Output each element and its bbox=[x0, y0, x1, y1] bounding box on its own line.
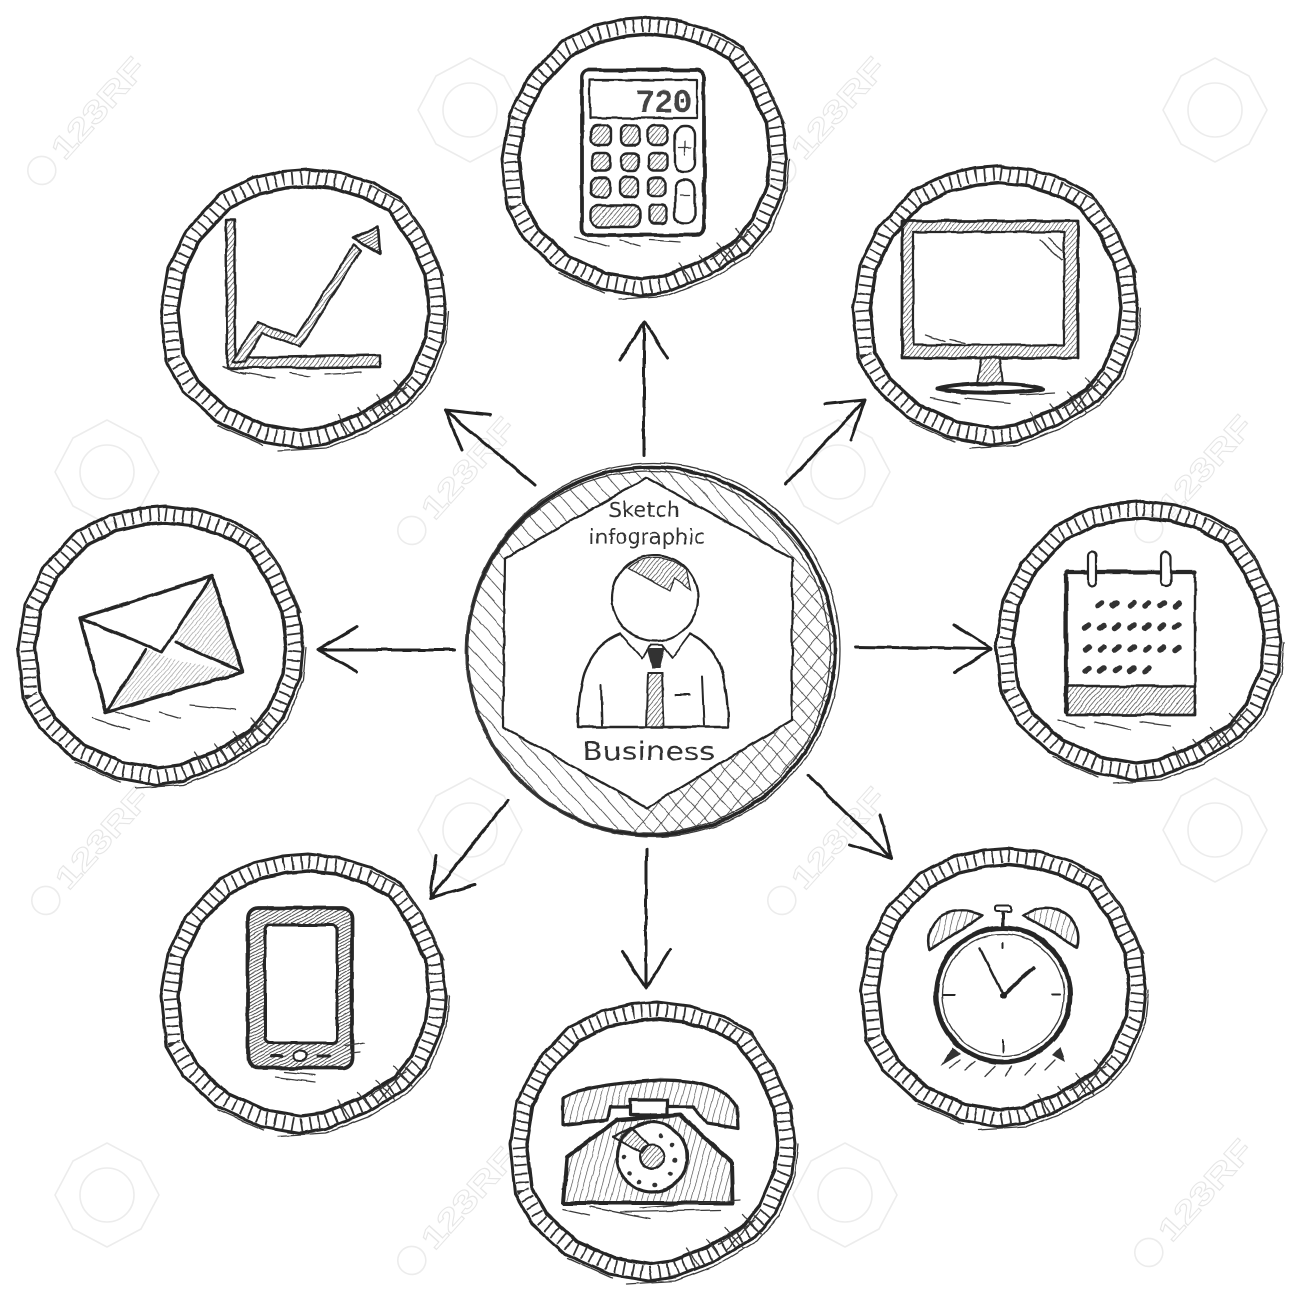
shadow bbox=[575, 237, 680, 247]
watermark stamps: 123RF bbox=[1151, 1133, 1260, 1248]
arrows from centre bbox=[318, 322, 992, 988]
panel: retro phone bbox=[510, 1002, 798, 1284]
arrow: to envelope bbox=[318, 627, 455, 672]
arrow: to mobile bbox=[430, 800, 508, 898]
collar bbox=[620, 634, 690, 658]
binder rings bbox=[1088, 552, 1096, 586]
watermark stamps: 123RF bbox=[1151, 409, 1260, 524]
watermark stamps: 123RF bbox=[44, 51, 153, 166]
panel: calculator bbox=[502, 17, 790, 299]
ring bbox=[161, 854, 449, 1136]
axes bbox=[226, 220, 380, 368]
bells bbox=[929, 910, 983, 950]
watermark stamps: 123RF bbox=[414, 1141, 523, 1256]
ring bbox=[18, 506, 306, 788]
hatched frame bbox=[467, 467, 835, 835]
panel: smartphone bbox=[161, 854, 449, 1136]
icon: smartphone bbox=[248, 908, 365, 1082]
ring bbox=[853, 166, 1141, 448]
handset bbox=[563, 1080, 738, 1128]
panel: monitor bbox=[853, 166, 1141, 448]
watermark stamps: 123RF bbox=[414, 411, 523, 526]
clock body bbox=[936, 928, 1070, 1062]
label: infographic: infographic bbox=[589, 525, 705, 549]
panel: alarm clock bbox=[861, 848, 1149, 1130]
dial bbox=[617, 1122, 687, 1192]
watermark stamps: 123RF bbox=[784, 781, 893, 896]
icon: rotary telephone bbox=[562, 1080, 740, 1219]
watermark stamps: 123RF bbox=[48, 781, 157, 896]
tie bbox=[646, 673, 664, 727]
panel: centre business hub bbox=[466, 463, 845, 840]
label: sketch: Sketch bbox=[608, 498, 680, 522]
label: business: Business bbox=[582, 737, 715, 767]
base bbox=[563, 1115, 733, 1203]
arrow: to calendar bbox=[856, 625, 992, 672]
outer ring bbox=[467, 467, 835, 835]
torso bbox=[578, 634, 728, 727]
arrow: to monitor bbox=[785, 400, 865, 485]
icon: alarm clock bbox=[929, 906, 1078, 1076]
arrow: to clock bbox=[808, 775, 892, 858]
hands and ticks bbox=[980, 948, 1003, 995]
trend arrow bbox=[232, 245, 361, 362]
arrow: to retro phone bbox=[622, 850, 670, 988]
ring bbox=[510, 1002, 798, 1284]
icon: desk calendar bbox=[1058, 552, 1195, 730]
icon: monitor bbox=[902, 221, 1078, 404]
feet bbox=[941, 1047, 1065, 1066]
sleeves and pocket bbox=[601, 676, 704, 725]
icon: calculator bbox=[575, 70, 704, 247]
display digits: 720 bbox=[636, 85, 692, 122]
head bbox=[612, 555, 698, 641]
panel: envelope bbox=[18, 506, 306, 788]
icon: envelope bbox=[80, 576, 243, 730]
watermark stamps: 123RF bbox=[784, 51, 893, 166]
cross hatch on right side bbox=[634, 570, 834, 832]
panel: growth chart bbox=[161, 169, 449, 451]
ring bbox=[161, 169, 449, 451]
icon: rising line chart bbox=[222, 220, 380, 378]
panel: calendar bbox=[996, 501, 1284, 783]
person icon bbox=[578, 555, 728, 727]
ring bbox=[502, 17, 790, 299]
plus and minus keys bbox=[675, 126, 695, 172]
hair bbox=[628, 557, 690, 591]
arrow: up to calculator bbox=[620, 322, 668, 455]
top hammer bbox=[1002, 912, 1004, 925]
ring bbox=[861, 848, 1149, 1130]
arrow: to chart bbox=[445, 410, 535, 485]
hexagon outline bbox=[503, 478, 792, 808]
ring bbox=[996, 501, 1284, 783]
day marks bbox=[1085, 603, 1179, 671]
keys bbox=[591, 125, 611, 145]
